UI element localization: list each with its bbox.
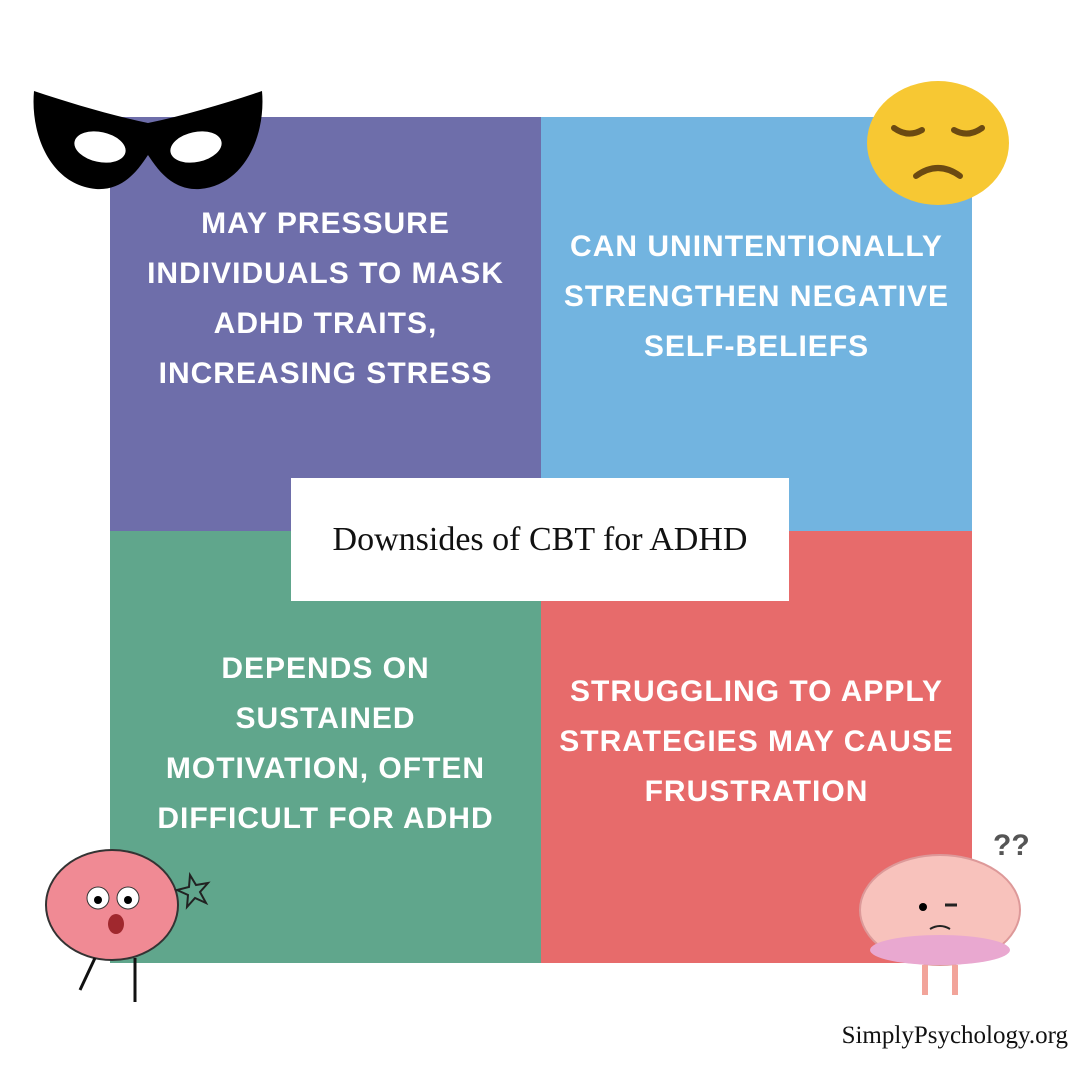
title box	[291, 478, 789, 601]
panel: mask traits: INCREASING STRESS	[159, 357, 492, 390]
panel: mask traits: INDIVIDUALS TO MASK	[147, 257, 504, 290]
panel: mask traits: ADHD TRAITS,	[214, 307, 437, 340]
panel: sustained motivation: DEPENDS ON	[221, 652, 430, 685]
panel: mask traits	[110, 117, 541, 531]
panel: negative self-beliefs	[541, 117, 972, 531]
panel: frustration: STRUGGLING TO APPLY	[570, 675, 943, 708]
icon: sad emoji	[867, 81, 1009, 205]
panel: sustained motivation: DIFFICULT FOR ADHD	[157, 802, 494, 835]
icon: confused brain	[859, 829, 1030, 995]
panel: sustained motivation: SUSTAINED	[235, 702, 416, 735]
panel: sustained motivation	[110, 531, 541, 963]
title box: Downsides of CBT for ADHD	[333, 520, 747, 558]
panel: frustration: FRUSTRATION	[645, 775, 868, 808]
icon: dizzy brain	[45, 849, 210, 1002]
icon: mask	[34, 91, 262, 190]
footer: source: SimplyPsychology.org	[842, 1022, 1068, 1049]
panel: negative self-beliefs: STRENGTHEN NEGATIVE	[564, 280, 949, 313]
panel: mask traits: MAY PRESSURE	[201, 207, 450, 240]
panel: frustration: STRATEGIES MAY CAUSE	[559, 725, 954, 758]
panel: negative self-beliefs: SELF-BELIEFS	[644, 330, 869, 363]
icon: confused brain: ??	[993, 829, 1030, 862]
panel: frustration	[541, 531, 972, 963]
panel: sustained motivation: MOTIVATION, OFTEN	[166, 752, 485, 785]
panel: negative self-beliefs: CAN UNINTENTIONALLY	[570, 230, 943, 263]
